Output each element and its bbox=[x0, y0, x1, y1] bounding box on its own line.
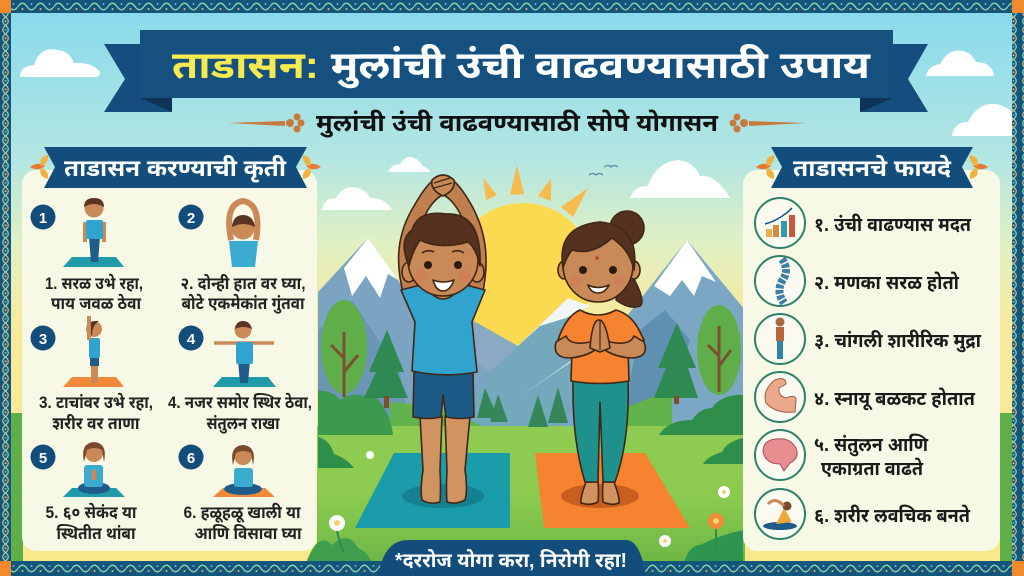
step 1 bbox=[30, 198, 143, 313]
step 6: 6. हळूहळू खाली या bbox=[184, 502, 301, 524]
step 2: बोटे एकमेकांत गुंतवा bbox=[182, 293, 305, 314]
benefit 5: brain icon bbox=[755, 430, 929, 480]
border top bbox=[0, 0, 1024, 13]
grass ground bbox=[11, 390, 1013, 563]
step 5: 5. ६० सेकंद या bbox=[46, 502, 137, 522]
boy standing with raised arms bbox=[399, 175, 486, 508]
border right bbox=[1012, 0, 1024, 576]
step 1: पाय जवळ ठेवा bbox=[51, 293, 142, 313]
step 5: 5 bbox=[39, 450, 47, 467]
footer message pill: *दररोज योगा करा, निरोगी रहा! bbox=[395, 548, 627, 572]
steps heading ribbon: ताडासन करण्याची कृती bbox=[64, 155, 287, 182]
benefit 5: brain icon: ५. संतुलन आणि bbox=[814, 434, 929, 457]
ornament left bbox=[228, 114, 304, 132]
benefit 6: side bend icon: ६. शरीर लवचिक बनते bbox=[814, 504, 971, 527]
step 3: शरीर वर ताणा bbox=[52, 413, 140, 433]
step 3 bbox=[30, 316, 153, 433]
benefits heading ribbon bbox=[756, 147, 988, 188]
ornament right bbox=[730, 114, 806, 132]
cloud centre left bbox=[322, 187, 392, 210]
girl standing in prayer pose bbox=[555, 211, 645, 508]
trees left bbox=[321, 300, 508, 422]
step 4: संतुलन राखा bbox=[206, 414, 280, 434]
yoga mat orange bbox=[535, 453, 690, 528]
step 2: 2 bbox=[187, 210, 195, 227]
step 6 bbox=[178, 444, 302, 543]
step 1: 1. सरळ उभे रहा, bbox=[45, 273, 143, 293]
step 3: 3. टाचांवर उभे रहा, bbox=[39, 392, 153, 412]
cloud top left bbox=[20, 49, 100, 77]
benefit 4: muscle icon bbox=[755, 372, 976, 422]
step 4: 4. नजर समोर स्थिर ठेवा, bbox=[168, 392, 312, 412]
border left bbox=[0, 0, 11, 576]
step 6: 6 bbox=[187, 450, 195, 467]
step 5 bbox=[30, 442, 137, 543]
steps heading ribbon bbox=[30, 147, 321, 188]
step 2: २. दोन्ही हात वर घ्या, bbox=[180, 273, 306, 293]
sun with rays bbox=[452, 165, 594, 345]
cloud centre right bbox=[630, 160, 730, 198]
birds bbox=[589, 166, 618, 175]
step 2 bbox=[178, 201, 306, 314]
benefit 1: growth chart icon bbox=[755, 198, 972, 248]
benefit 5: brain icon: एकाग्रता वाढते bbox=[821, 457, 924, 480]
trees right bbox=[528, 305, 741, 427]
yoga mat blue bbox=[355, 453, 510, 528]
step 1: 1 bbox=[39, 210, 47, 227]
cloud centre small bbox=[388, 157, 430, 172]
flowers bbox=[329, 451, 730, 552]
step 4: 4 bbox=[187, 331, 196, 348]
title banner bbox=[104, 30, 928, 112]
subtitle bbox=[228, 109, 806, 138]
step 5: स्थितीत थांबा bbox=[56, 523, 136, 543]
step 3: 3 bbox=[39, 331, 47, 348]
benefit 2: spine icon: २. मणका सरळ होतो bbox=[814, 272, 959, 294]
benefit 2: spine icon bbox=[755, 256, 959, 306]
benefit 4: muscle icon: ४. स्नायू बळकट होतात bbox=[814, 388, 976, 411]
step 6: आणि विसावा घ्या bbox=[194, 523, 302, 543]
title text: ताडासन: मुलांची उंची वाढवण्यासाठी उपाय bbox=[172, 43, 871, 89]
benefit 3: posture icon: ३. चांगली शारीरिक मुद्रा bbox=[814, 329, 981, 353]
benefit 6: side bend icon bbox=[755, 489, 971, 539]
cloud top right bbox=[926, 50, 994, 76]
panel: benefits bbox=[743, 147, 1000, 551]
benefits heading ribbon: ताडासनचे फायदे bbox=[793, 155, 952, 181]
benefit 3: posture icon bbox=[755, 314, 981, 364]
subtitle text: मुलांची उंची वाढवण्यासाठी सोपे योगासन bbox=[316, 109, 719, 138]
mountains bbox=[318, 238, 745, 430]
cloud right bbox=[952, 104, 1012, 136]
step 4 bbox=[168, 321, 312, 434]
panel: steps bbox=[22, 147, 321, 551]
border bottom bbox=[0, 561, 1024, 576]
benefit 1: growth chart icon: १. उंची वाढण्यास मदत bbox=[814, 214, 972, 236]
footer message pill bbox=[378, 540, 646, 576]
